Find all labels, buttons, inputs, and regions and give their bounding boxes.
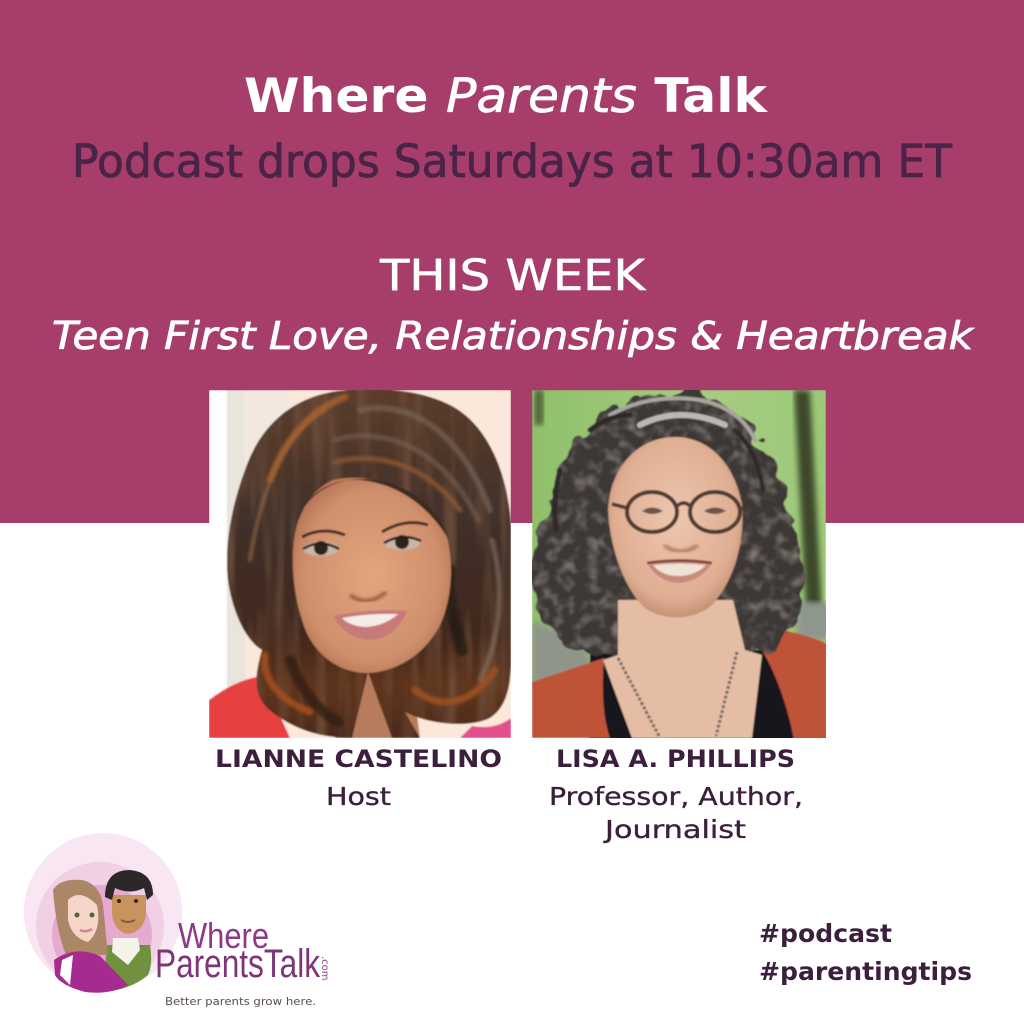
mouth xyxy=(333,610,407,640)
face xyxy=(608,437,743,617)
host name: LIANNE CASTELINO xyxy=(215,745,502,773)
hair back xyxy=(532,391,803,655)
logo word ParentsTalk: ParentsTalk xyxy=(155,942,321,986)
guest name: LISA A. PHILLIPS xyxy=(556,745,795,773)
curls xyxy=(555,398,763,530)
lower body base xyxy=(590,650,800,745)
logo woman xyxy=(53,880,128,993)
necklace xyxy=(618,658,659,736)
eyes xyxy=(303,542,339,556)
fringe xyxy=(296,479,449,540)
hashtag podcast: #podcast xyxy=(759,919,892,948)
host role: Host xyxy=(326,782,391,811)
mouth xyxy=(647,560,712,583)
guest label xyxy=(549,745,803,844)
photo: Lianne Castelino xyxy=(209,389,511,738)
cardigan right xyxy=(762,630,826,738)
nose shadow xyxy=(664,545,698,552)
eyes xyxy=(642,508,663,514)
host label xyxy=(215,745,502,811)
chest and neck xyxy=(603,600,762,738)
this week heading: THIS WEEK xyxy=(379,251,647,301)
face xyxy=(293,478,451,673)
eyebrows xyxy=(302,531,345,537)
header band xyxy=(0,0,1024,523)
hair highlights xyxy=(250,397,499,722)
hair back xyxy=(227,389,511,738)
glasses xyxy=(627,492,677,532)
subtitle: Podcast drops Saturdays at 10:30am ET xyxy=(72,135,952,188)
logo tagline: Better parents grow here. xyxy=(165,995,316,1008)
hashtag parentingtips: #parentingtips xyxy=(759,957,972,986)
hashtags xyxy=(759,919,972,986)
nose shadow xyxy=(350,592,386,601)
forest trunks xyxy=(794,390,822,610)
photo: Lisa A. Phillips xyxy=(532,390,830,745)
neck xyxy=(334,672,420,738)
top garment xyxy=(209,676,290,738)
cardigan left xyxy=(532,658,610,738)
rocks xyxy=(532,619,591,690)
logo dot com: .com xyxy=(319,956,330,981)
logo word Where: Where xyxy=(178,915,269,956)
logo man xyxy=(103,870,153,992)
guest role second line: Journalist xyxy=(603,815,746,844)
guest role: Professor, Author, xyxy=(549,782,803,811)
logo circles xyxy=(24,833,182,991)
logo xyxy=(24,833,330,1008)
episode topic: Teen First Love, Relationships & Heartbreak xyxy=(52,314,975,358)
title: Where Parents Talk xyxy=(244,69,769,124)
